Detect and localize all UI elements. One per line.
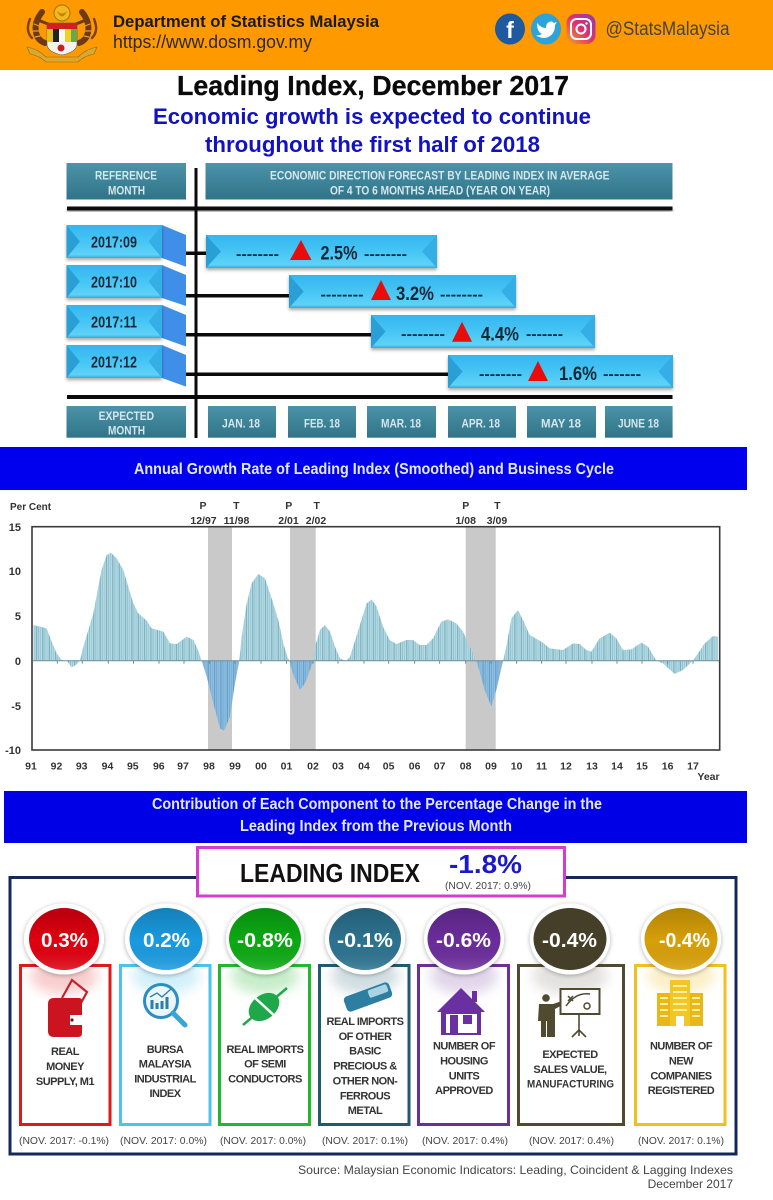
x axis years: 10 bbox=[511, 760, 523, 772]
peak and trough labels bbox=[190, 500, 507, 527]
forecast bar 2.5% bbox=[206, 235, 437, 268]
card: expected sales value manufacturing: -0.4% bbox=[542, 930, 597, 952]
forecast header: ECONOMIC DIRECTION FORECAST BY LEADING INDEX IN AVERAGE bbox=[270, 168, 610, 182]
source note: December 2017 bbox=[648, 1177, 733, 1191]
forecast bar 1.6% bbox=[448, 355, 673, 388]
forecast bar 4.4%: 4.4% bbox=[481, 324, 519, 346]
x axis years: 08 bbox=[460, 760, 472, 772]
card: expected sales value manufacturing: MANUFACTURING bbox=[527, 1079, 614, 1091]
card: expected sales value manufacturing bbox=[518, 904, 624, 1147]
panel: components bbox=[10, 848, 736, 1154]
card: real imports of semi conductors: (NOV. 2017: 0.0%) bbox=[220, 1135, 306, 1147]
card: real money supply: MONEY bbox=[46, 1061, 85, 1073]
card: real imports of other basic metal: -0.1% bbox=[337, 930, 393, 952]
expected month row bbox=[66, 406, 673, 438]
x axis years: 07 bbox=[434, 760, 446, 772]
icon: office buildings bbox=[657, 980, 703, 1026]
forecast bar 3.2% bbox=[289, 275, 516, 308]
subtitle: Economic growth is expected to continue bbox=[153, 104, 591, 129]
x axis years: 96 bbox=[153, 760, 165, 772]
card: real money supply bbox=[19, 904, 110, 1147]
title: Leading Index, December 2017 bbox=[177, 70, 569, 101]
forecast bar 3.2%: -------- bbox=[320, 286, 364, 304]
leading index headline box: LEADING INDEX bbox=[240, 858, 421, 888]
x axis years bbox=[25, 760, 720, 783]
section heading: annual growth rate bbox=[0, 447, 747, 490]
icon: magnifier chart bbox=[144, 984, 185, 1025]
expected month row: EXPECTED bbox=[99, 409, 154, 423]
card: real imports of semi conductors: -0.8% bbox=[237, 930, 293, 952]
social handle: @StatsMalaysia bbox=[606, 19, 730, 40]
card: bursa malaysia index: MALAYSIA bbox=[139, 1059, 192, 1071]
expected month row: MAY 18 bbox=[541, 416, 581, 430]
forecast bar 2.5%: 2.5% bbox=[320, 244, 358, 264]
y axis ticks: 10 bbox=[9, 566, 21, 578]
leading index headline box bbox=[198, 848, 564, 896]
x axis years: 97 bbox=[177, 760, 189, 772]
peak and trough labels: 2/01 bbox=[278, 515, 299, 527]
peak and trough labels: 1/08 bbox=[455, 515, 476, 527]
icon: coat of arms bbox=[27, 5, 97, 62]
y axis ticks: 0 bbox=[15, 656, 21, 668]
x axis years: 16 bbox=[662, 760, 674, 772]
x axis years: 01 bbox=[281, 760, 292, 772]
x axis years: 95 bbox=[127, 760, 139, 772]
icon: presenter with board bbox=[538, 989, 600, 1037]
x axis years: 15 bbox=[636, 760, 648, 772]
leading index headline box: -1.8% bbox=[449, 849, 522, 879]
card: real imports of other basic metal: (NOV. 2017: 0.1%) bbox=[322, 1135, 408, 1147]
x axis years: 11 bbox=[536, 760, 547, 772]
expected month row: JAN. 18 bbox=[222, 416, 260, 430]
row 2017:10 reference bbox=[66, 265, 186, 306]
y axis ticks bbox=[5, 522, 21, 757]
card: real imports of semi conductors: REAL IMPORTS bbox=[227, 1044, 304, 1056]
leading index headline box: (NOV. 2017: 0.9%) bbox=[445, 881, 531, 892]
card: real money supply: (NOV. 2017: -0.1%) bbox=[19, 1135, 109, 1147]
x axis years: 94 bbox=[102, 760, 113, 772]
card: number of housing units approved: -0.6% bbox=[436, 930, 491, 952]
forecast bar 4.4% bbox=[371, 315, 595, 348]
expected month row: JUNE 18 bbox=[618, 416, 659, 430]
y axis ticks: -10 bbox=[5, 745, 21, 757]
card: real imports of semi conductors: CONDUCTORS bbox=[228, 1073, 302, 1085]
forecast bar 2.5%: -------- bbox=[236, 246, 279, 263]
card: number of housing units approved: NUMBER OF bbox=[433, 1040, 496, 1052]
card: number of housing units approved: HOUSING bbox=[440, 1055, 488, 1067]
y axis ticks: -5 bbox=[11, 701, 21, 713]
card: real imports of other basic metal: OTHER NON- bbox=[333, 1075, 398, 1087]
icon: facebook bbox=[495, 14, 525, 44]
reference month header: REFERENCE bbox=[95, 168, 157, 182]
card: number of new companies registered: (NOV. 2017: 0.1%) bbox=[638, 1135, 724, 1147]
section heading: contribution bbox=[4, 791, 747, 843]
card: real money supply: SUPPLY, M1 bbox=[36, 1076, 94, 1088]
section heading: contribution: Leading Index from the Previous Month bbox=[240, 818, 512, 835]
x axis years: 09 bbox=[485, 760, 497, 772]
card: number of new companies registered: -0.4% bbox=[659, 930, 710, 952]
card: real imports of semi conductors bbox=[220, 904, 310, 1147]
expected month row: APR. 18 bbox=[462, 416, 500, 430]
peak and trough labels: T bbox=[233, 500, 240, 512]
card: number of new companies registered: REGISTERED bbox=[648, 1085, 715, 1097]
reference month header bbox=[66, 163, 186, 200]
card: real imports of other basic metal: PRECIOUS & bbox=[333, 1061, 397, 1073]
row 2017:09 reference bbox=[66, 225, 186, 267]
expected month row: FEB. 18 bbox=[304, 416, 340, 430]
card: number of housing units approved: UNITS bbox=[449, 1070, 479, 1082]
row 2017:11 reference: 2017:11 bbox=[91, 314, 137, 332]
line bar chart: leading index growth bbox=[5, 500, 720, 783]
card: real imports of other basic metal: OF OTHER bbox=[339, 1031, 392, 1043]
section heading: annual growth rate: Annual Growth Rate of Leading Index (Smoothed) and Business Cycle bbox=[134, 461, 614, 478]
forecast bar 3.2%: 3.2% bbox=[396, 284, 434, 305]
x axis years: 06 bbox=[409, 760, 421, 772]
expected month row: MONTH bbox=[108, 424, 145, 438]
website: https://www.dosm.gov.my bbox=[113, 32, 312, 52]
card: bursa malaysia index: BURSA bbox=[147, 1044, 184, 1056]
card: bursa malaysia index: 0.2% bbox=[143, 930, 190, 952]
x axis years: 17 bbox=[687, 760, 699, 772]
card: bursa malaysia index bbox=[120, 904, 210, 1147]
card: expected sales value manufacturing: (NOV. 2017: 0.4%) bbox=[529, 1135, 614, 1147]
forecast timeline chart bbox=[66, 163, 673, 438]
x axis years: 04 bbox=[358, 760, 370, 772]
row 2017:09 reference: 2017:09 bbox=[91, 234, 137, 252]
x axis years: 00 bbox=[255, 760, 267, 772]
x axis years: 99 bbox=[229, 760, 241, 772]
row 2017:12 reference bbox=[66, 345, 186, 387]
card: real money supply: REAL bbox=[51, 1046, 80, 1058]
forecast header bbox=[206, 163, 672, 200]
card: number of new companies registered bbox=[636, 904, 725, 1147]
card: bursa malaysia index: INDEX bbox=[149, 1088, 182, 1100]
card: real imports of other basic metal bbox=[320, 904, 409, 1147]
icon: facebook: f bbox=[506, 17, 514, 43]
x axis years: 91 bbox=[25, 760, 37, 772]
peak and trough labels: T bbox=[313, 500, 320, 512]
card: number of housing units approved bbox=[418, 904, 508, 1147]
card: expected sales value manufacturing: EXPECTED bbox=[542, 1049, 598, 1061]
expected month row: MAR. 18 bbox=[381, 416, 421, 430]
forecast bar 1.6%: ------- bbox=[603, 366, 641, 383]
card: real imports of other basic metal: REAL IMPORTS bbox=[327, 1016, 404, 1028]
source note bbox=[298, 1163, 733, 1191]
x axis years: 14 bbox=[611, 760, 623, 772]
x axis years: 02 bbox=[307, 760, 319, 772]
peak and trough labels: P bbox=[199, 500, 207, 512]
section heading: contribution: Contribution of Each Component to the Percentage Change in the bbox=[152, 796, 602, 813]
growth rate series bbox=[33, 553, 718, 731]
x axis years: 98 bbox=[203, 760, 215, 772]
card: real imports of other basic metal: METAL bbox=[348, 1105, 383, 1117]
x axis years: 12 bbox=[560, 760, 572, 772]
y axis label: Per Cent bbox=[10, 502, 52, 513]
icon: metal bar bbox=[343, 981, 393, 1013]
x axis years: 93 bbox=[76, 760, 88, 772]
subtitle bbox=[153, 104, 591, 157]
x axis years: 13 bbox=[586, 760, 598, 772]
source note: Source: Malaysian Economic Indicators: Leading, Coincident & Lagging Indexes bbox=[298, 1163, 733, 1177]
header banner bbox=[0, 0, 773, 70]
peak and trough labels: 2/02 bbox=[306, 515, 326, 527]
forecast bar 4.4%: -------- bbox=[401, 326, 445, 343]
card: real imports of other basic metal: FERROUS bbox=[340, 1090, 390, 1102]
card: number of new companies registered: NEW bbox=[669, 1055, 694, 1067]
row 2017:11 reference bbox=[66, 305, 186, 346]
card: number of new companies registered: NUMBER OF bbox=[650, 1040, 713, 1052]
icon: wallet bbox=[48, 980, 87, 1037]
subtitle: throughout the first half of 2018 bbox=[205, 132, 540, 157]
x axis years: 92 bbox=[51, 760, 62, 772]
icon: instagram bbox=[566, 14, 596, 44]
card: bursa malaysia index: INDUSTRIAL bbox=[134, 1073, 197, 1085]
card: number of new companies registered: COMPANIES bbox=[650, 1070, 712, 1082]
department name: Department of Statistics Malaysia bbox=[113, 12, 380, 31]
card: real money supply: 0.3% bbox=[41, 930, 88, 952]
peak and trough labels: T bbox=[494, 500, 501, 512]
card: bursa malaysia index: (NOV. 2017: 0.0%) bbox=[120, 1135, 207, 1147]
forecast bar 4.4%: ------- bbox=[526, 326, 563, 343]
card: real imports of other basic metal: BASIC bbox=[349, 1046, 381, 1058]
forecast bar 2.5%: -------- bbox=[364, 246, 407, 263]
x axis years: Year bbox=[697, 771, 720, 783]
icon: semiconductor bbox=[243, 987, 287, 1027]
row 2017:12 reference: 2017:12 bbox=[91, 354, 137, 372]
reference month header: MONTH bbox=[108, 184, 145, 198]
card: real imports of semi conductors: OF SEMI bbox=[244, 1059, 286, 1071]
recession bands bbox=[208, 527, 496, 750]
forecast bar 1.6%: 1.6% bbox=[559, 364, 597, 385]
forecast bar 3.2%: -------- bbox=[440, 286, 483, 304]
peak and trough labels: P bbox=[285, 500, 292, 512]
y axis ticks: 15 bbox=[9, 522, 21, 534]
icon: twitter bbox=[531, 14, 561, 44]
row 2017:10 reference: 2017:10 bbox=[91, 274, 137, 292]
forecast bar 1.6%: -------- bbox=[479, 366, 522, 383]
peak and trough labels: 11/98 bbox=[224, 515, 250, 527]
card: expected sales value manufacturing: SALES VALUE, bbox=[533, 1064, 607, 1076]
peak and trough labels: P bbox=[462, 500, 469, 512]
card: number of housing units approved: APPROVED bbox=[435, 1085, 493, 1097]
peak and trough labels: 12/97 bbox=[190, 515, 217, 527]
card: number of housing units approved: (NOV. 2017: 0.4%) bbox=[422, 1135, 508, 1147]
x axis years: 05 bbox=[383, 760, 395, 772]
y axis ticks: 5 bbox=[15, 611, 21, 623]
x axis years: 03 bbox=[332, 760, 344, 772]
forecast header: OF 4 TO 6 MONTHS AHEAD (YEAR ON YEAR) bbox=[330, 184, 550, 198]
icon: house bbox=[437, 988, 485, 1035]
peak and trough labels: 3/09 bbox=[487, 515, 507, 527]
